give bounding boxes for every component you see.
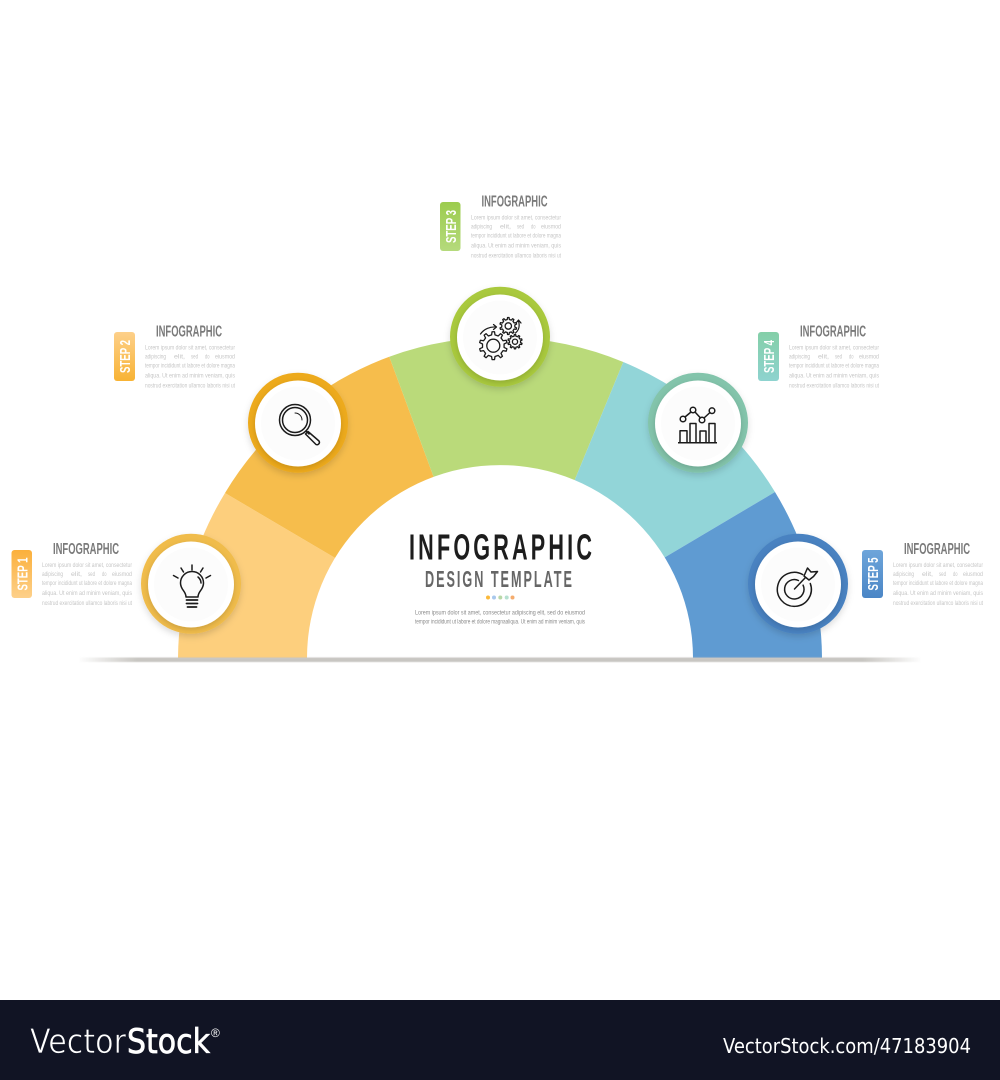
heading: step 1: INFOGRAPHIC: [53, 541, 119, 558]
text block: step 4: eiusmod: [859, 354, 879, 360]
text block: step 3: adipiscing: [471, 224, 492, 230]
dots: [486, 596, 514, 600]
text block: step 1: Lorem ipsum dolor sit amet, consectetur: [42, 562, 132, 569]
text block: step 4: tempor incididunt ut labore et dolore magna: [789, 362, 879, 370]
text block: step 3: Lorem ipsum dolor sit amet, consectetur: [471, 214, 561, 222]
tag: step 1: [12, 550, 32, 598]
center title block: [409, 528, 595, 626]
tag: step 3: [440, 202, 460, 251]
segment: step 4: [571, 362, 775, 562]
segment: step 2: [225, 357, 437, 562]
title: INFOGRAPHIC: [409, 528, 595, 568]
registered mark: ®: [211, 1026, 220, 1040]
text block: step 2: nostrud exercitation ullamco laboris nisi ut: [145, 382, 235, 390]
text block: step 1: aliqua. Ut enim ad minim veniam, quis: [42, 590, 132, 597]
text block: step 2: aliqua. Ut enim ad minim veniam, quis: [145, 372, 235, 380]
tag: step 5: STEP 5: [865, 558, 882, 590]
text block: step 1: do: [102, 571, 107, 578]
heading: step 2: INFOGRAPHIC: [156, 324, 222, 340]
step 3: [440, 194, 561, 387]
text block: step 3: aliqua. Ut enim ad minim veniam, quis: [471, 242, 561, 250]
text block: step 5: do: [953, 571, 958, 578]
text block: step 5: aliqua. Ut enim ad minim veniam, quis: [893, 590, 983, 597]
text block: step 3: [471, 214, 561, 260]
step 5: [748, 534, 983, 634]
logo: Stock: Stock: [127, 1022, 210, 1062]
text block: step 1: nostrud exercitation ullamco laboris nisi ut: [42, 600, 132, 607]
icon: chart: [678, 407, 717, 443]
badge: step 4: [648, 373, 748, 473]
step 4: [648, 324, 879, 473]
text block: step 2: eiusmod: [215, 354, 235, 360]
semicircle chart: [178, 337, 822, 658]
text block: step 1: elit,: [71, 571, 82, 578]
subtitle: DESIGN TEMPLATE: [425, 566, 574, 592]
heading: step 4: INFOGRAPHIC: [800, 324, 866, 340]
text block: step 3: sed: [517, 224, 524, 230]
footer band: [0, 1000, 1000, 1080]
text block: step 4: nostrud exercitation ullamco laboris nisi ut: [789, 382, 879, 390]
text block: step 1: sed: [88, 571, 95, 578]
segment: step 3: [389, 337, 623, 489]
segment: step 1: [178, 493, 342, 658]
text block: step 3: do: [531, 224, 536, 230]
text block: step 5: adipiscing: [893, 571, 914, 578]
step 2: [114, 324, 348, 473]
heading: step 3: INFOGRAPHIC: [482, 194, 548, 210]
tag: step 4: [758, 332, 779, 381]
text block: step 1: adipiscing: [42, 571, 63, 578]
segment: step 5: [657, 492, 822, 658]
tag: step 2: [114, 332, 135, 381]
icon: light bulb: [174, 565, 210, 607]
description: Lorem ipsum dolor sit amet, consectetur adipiscing elit, sed do eiusmod: [415, 610, 585, 616]
text block: step 4: aliqua. Ut enim ad minim veniam, quis: [789, 372, 879, 380]
icon: magnifier: [280, 404, 319, 445]
badge: step 3: [450, 287, 550, 387]
text block: step 5: sed: [939, 571, 946, 578]
description: tempor incididunt ut labore et dolore magnaaliqua. Ut enim ad minim veniam, quis: [415, 618, 585, 626]
text block: step 5: [893, 562, 983, 607]
text block: step 2: sed: [191, 354, 198, 360]
text block: step 1: [42, 562, 132, 607]
inner white semicircle: [307, 465, 693, 658]
image id: VectorStock.com/47183904: [723, 1034, 971, 1058]
text block: step 2: do: [205, 354, 210, 360]
text block: step 4: elit,: [818, 354, 829, 360]
text block: step 5: eiusmod: [963, 571, 983, 578]
text block: step 5: elit,: [922, 571, 933, 578]
text block: step 5: Lorem ipsum dolor sit amet, consectetur: [893, 562, 983, 569]
text block: step 3: nostrud exercitation ullamco laboris nisi ut: [471, 252, 561, 260]
icon: gears: [480, 318, 522, 360]
badge: step 5: [748, 534, 848, 634]
badge: step 2: [248, 373, 348, 473]
text block: step 3: elit,: [500, 224, 511, 230]
tag: step 1: STEP 1: [14, 558, 31, 590]
logo: Vector: Vector: [30, 1022, 126, 1062]
text block: step 4: Lorem ipsum dolor sit amet, consectetur: [789, 344, 879, 352]
text block: step 4: adipiscing: [789, 354, 810, 360]
text block: step 2: Lorem ipsum dolor sit amet, consectetur: [145, 344, 235, 352]
text block: step 3: tempor incididunt ut labore et dolore magna: [471, 232, 561, 240]
badge: step 1: [141, 534, 241, 634]
text block: step 4: sed: [835, 354, 842, 360]
icon: target: [777, 568, 818, 606]
text block: step 2: adipiscing: [145, 354, 166, 360]
tag: step 3: STEP 3: [443, 210, 460, 243]
tag: step 5: [862, 550, 883, 598]
description: [415, 610, 585, 626]
baseline shadow: [78, 658, 922, 662]
tag: step 2: STEP 2: [117, 340, 134, 373]
text block: step 2: elit,: [174, 354, 185, 360]
step 1: [12, 534, 241, 634]
text block: step 4: do: [849, 354, 854, 360]
text block: step 1: eiusmod: [112, 571, 132, 578]
text block: step 1: tempor incididunt ut labore et dolore magna: [42, 580, 132, 587]
text block: step 3: eiusmod: [541, 224, 561, 230]
tag: step 4: STEP 4: [761, 340, 778, 373]
text block: step 2: [145, 344, 235, 390]
text block: step 2: tempor incididunt ut labore et dolore magna: [145, 362, 235, 370]
text block: step 4: [789, 344, 879, 390]
